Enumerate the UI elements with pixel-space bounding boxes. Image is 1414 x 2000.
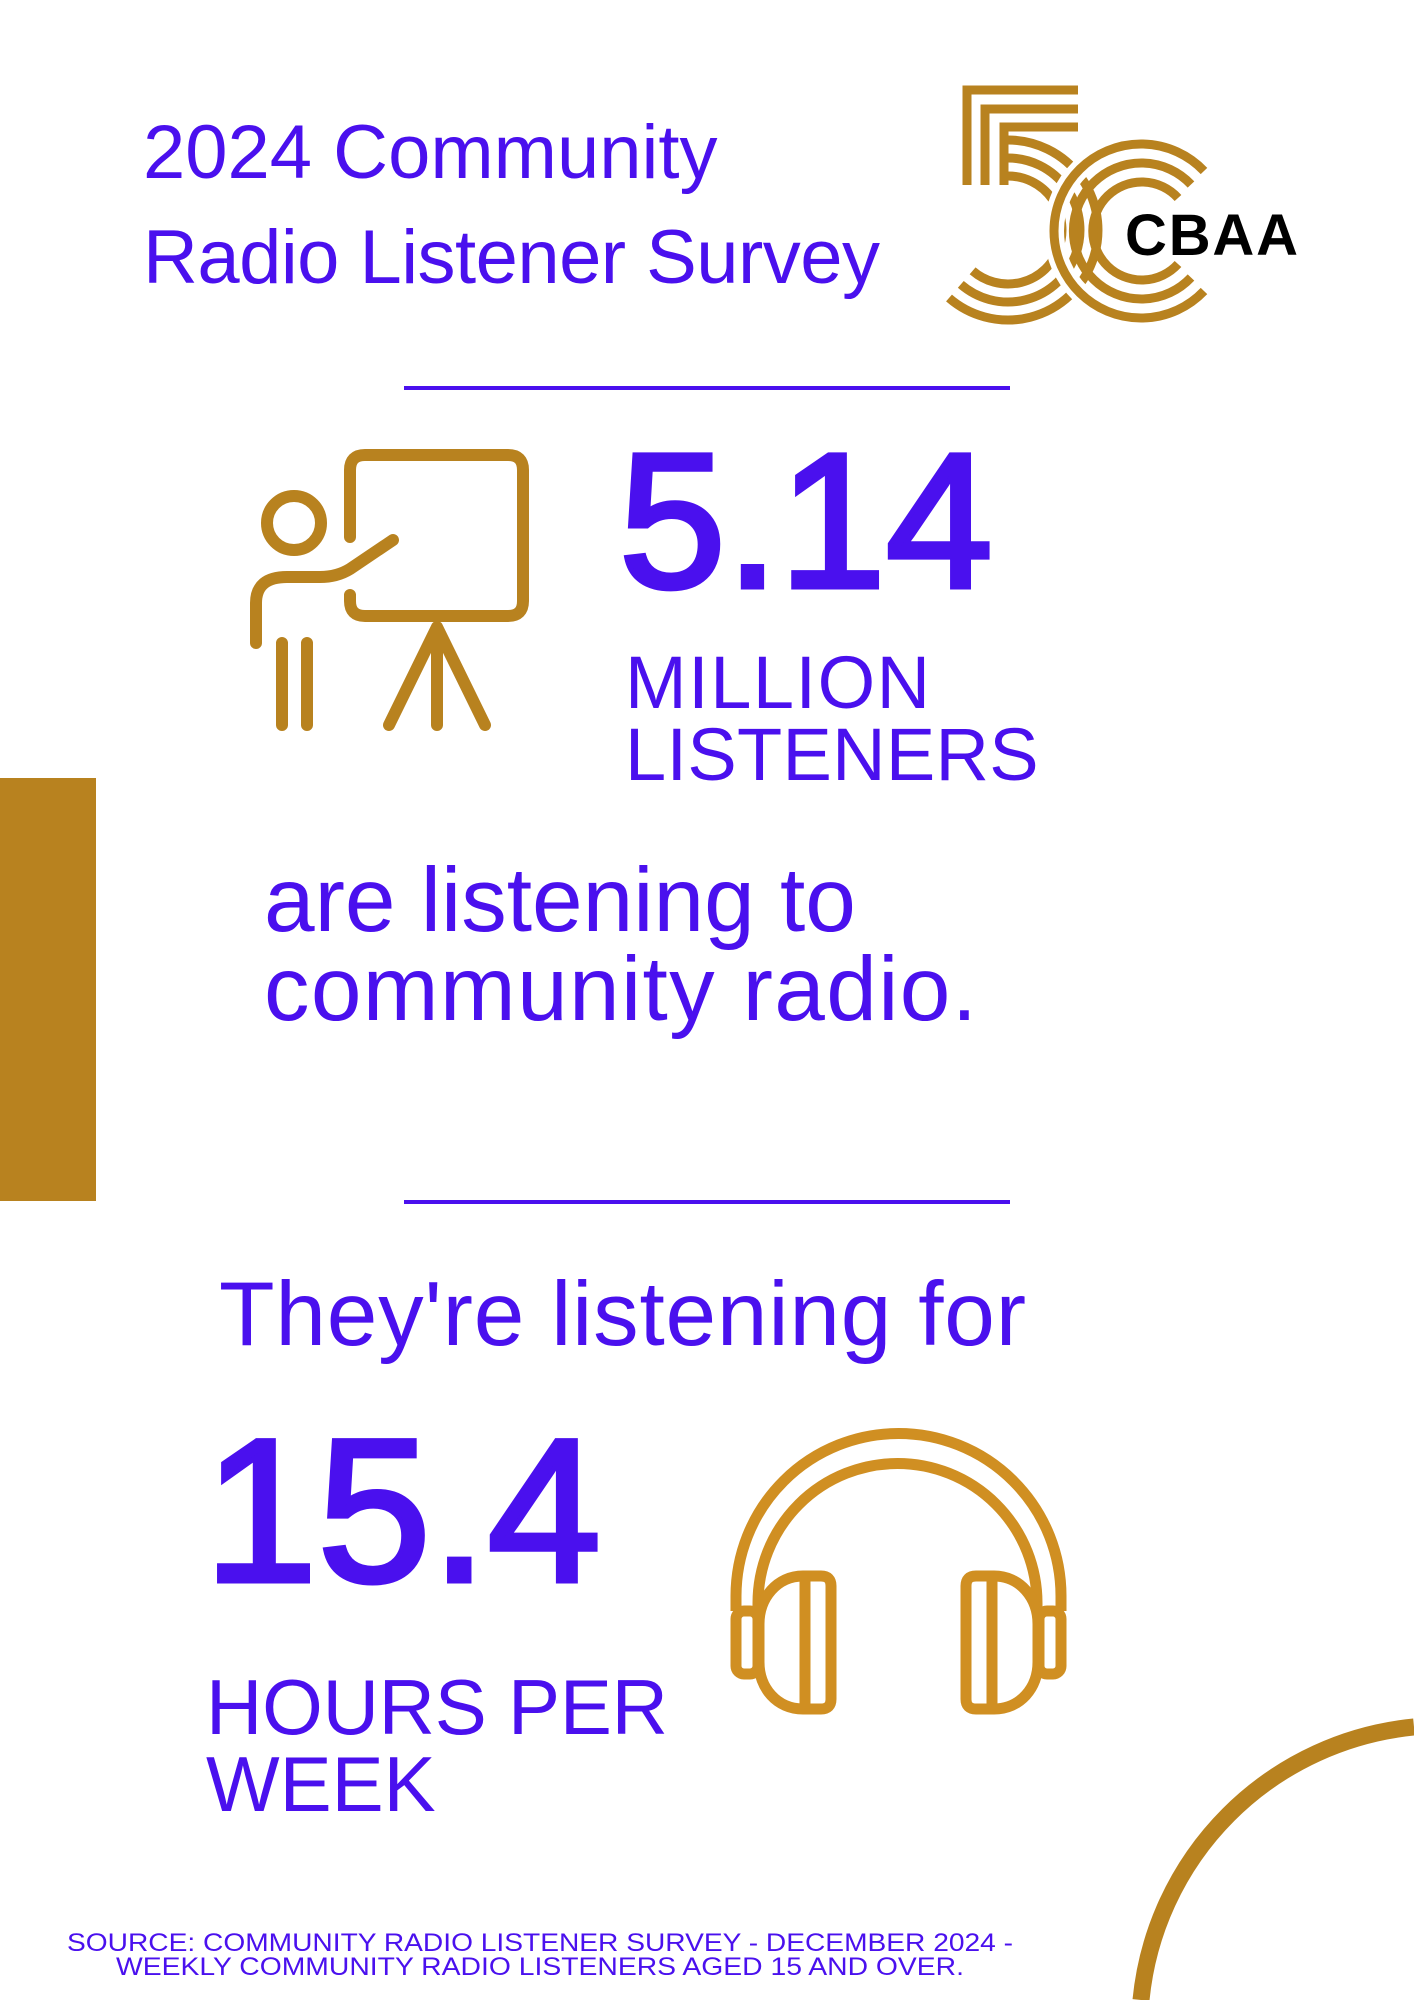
source note: SOURCE: COMMUNITY RADIO LISTENER SURVEY - DECEMBER 2024 - (67, 1929, 1013, 1957)
stat: 15.4 hours per week (204, 1397, 668, 1828)
source note: WEEKLY COMMUNITY RADIO LISTENERS AGED 15 AND OVER. (116, 1953, 964, 1981)
decorative arc bottom right (1141, 1727, 1414, 2000)
text: are listening to community radio: are listening to (264, 850, 856, 951)
stat: 15.4 hours per week: WEEK (206, 1740, 436, 1828)
source note (67, 1929, 1013, 1981)
text: are listening to community radio: community radio. (264, 939, 977, 1040)
title: Radio Listener Survey (143, 215, 880, 300)
stat: 5.14 million listeners (619, 413, 1039, 796)
stat: 5.14 million listeners: MILLION (625, 641, 932, 724)
stat: 15.4 hours per week: 15.4 (204, 1397, 601, 1625)
heading: They're listening for: They're listening for (219, 1264, 1026, 1365)
stat: 5.14 million listeners: 5.14 (619, 413, 993, 628)
divider middle (404, 1200, 1010, 1204)
logo: CBAA 50: CBAA (1125, 203, 1298, 268)
stat: 5.14 million listeners: LISTENERS (625, 713, 1039, 796)
icon: presenter at easel (256, 455, 523, 725)
gold side bar (0, 778, 96, 1201)
icon: headphones (736, 1434, 1061, 1709)
text: are listening to community radio (264, 850, 977, 1040)
title: 2024 Community (143, 110, 718, 195)
stat: 15.4 hours per week: HOURS PER (206, 1663, 668, 1751)
divider top (404, 386, 1010, 390)
logo: CBAA 50 (949, 90, 1298, 320)
title (143, 110, 880, 300)
